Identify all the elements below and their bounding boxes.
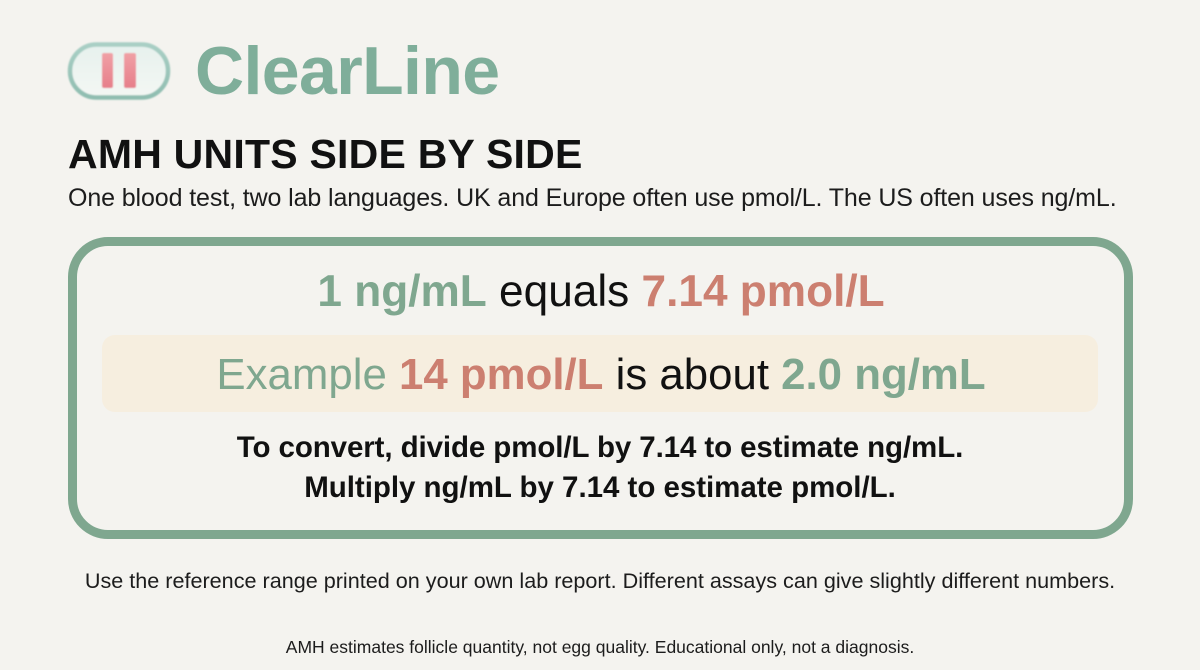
heading: AMH UNITS SIDE BY SIDE [68, 131, 583, 177]
disclaimer: AMH estimates follicle quantity, not egg quality. Educational only, not a diagnosis. [286, 637, 914, 657]
panel: conversion frame [68, 237, 1133, 539]
example statement: Example 14 pmol/L is about 2.0 ng/mL [216, 350, 986, 399]
multiply instruction: Multiply ng/mL by 7.14 to estimate pmol/L. [304, 471, 896, 504]
icon: pill logo [67, 42, 171, 101]
conversion statement: 1 ng/mL equals 7.14 pmol/L [317, 267, 885, 316]
logo wordmark: ClearLine [195, 33, 500, 109]
divide instruction: To convert, divide pmol/L by 7.14 to estimate ng/mL. [237, 431, 963, 464]
reference range note: Use the reference range printed on your own lab report. Different assays can give slightly different numbers. [85, 568, 1115, 593]
subheading: One blood test, two lab languages. UK and Europe often use pmol/L. The US often uses ng/mL. [68, 184, 1117, 212]
panel: example highlight [102, 335, 1098, 412]
